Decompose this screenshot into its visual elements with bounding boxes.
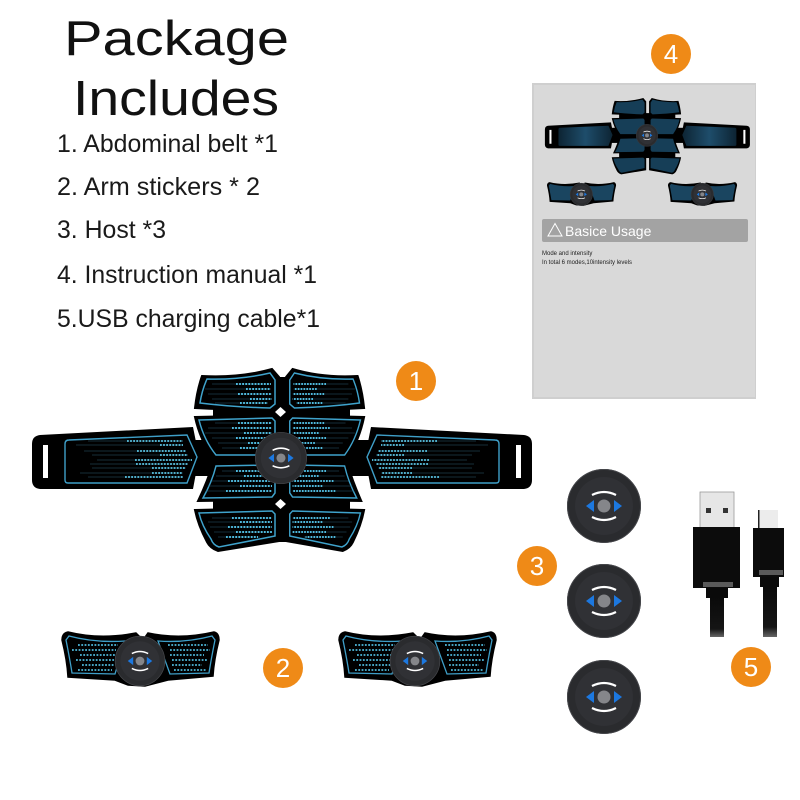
instruction manual: [532, 83, 756, 399]
badge 1: 1: [409, 366, 423, 396]
title: Includes: [73, 72, 279, 126]
package contents list: [57, 130, 320, 333]
title: [64, 12, 289, 126]
badge 3: [517, 546, 557, 586]
badge 2: 2: [276, 653, 290, 683]
white gaps: [275, 407, 286, 509]
host unit bottom: [567, 660, 641, 734]
usage text: [542, 251, 632, 266]
usage text: Mode and intensity: [542, 251, 592, 257]
belt control hub: [255, 432, 307, 484]
belt backing: [190, 377, 372, 542]
usage heading bar: Basice Usage: [565, 223, 652, 239]
package contents list: 5.USB charging cable*1: [57, 305, 320, 333]
abdominal belt: [32, 369, 532, 551]
left strap: [32, 427, 199, 489]
USB-C connector: [753, 510, 784, 637]
package contents list: 4. Instruction manual *1: [57, 261, 317, 289]
package contents list: 1. Abdominal belt *1: [57, 130, 278, 158]
badge 5: [731, 647, 771, 687]
package contents list: 2. Arm stickers * 2: [57, 173, 260, 201]
right strap: [365, 427, 532, 489]
manual arm sticker right: [668, 182, 737, 206]
usage text: In total 6 modes,10intensity levels: [542, 260, 632, 266]
badge 4: [651, 34, 691, 74]
USB cable: [693, 492, 784, 637]
badge 1: [396, 361, 436, 401]
host unit top: [567, 469, 641, 543]
manual arm sticker left: [547, 182, 616, 206]
badge 5: 5: [744, 652, 758, 682]
host unit middle: [567, 564, 641, 638]
manual belt illustration: [545, 98, 750, 174]
right pads: [286, 369, 364, 551]
USB-A connector: [693, 492, 740, 637]
title: Package: [64, 12, 289, 66]
left pads: [195, 369, 279, 551]
badge 4: 4: [664, 39, 678, 69]
usage heading bar: [542, 219, 748, 242]
arm sticker right: [339, 632, 496, 686]
package contents list: 3. Host *3: [57, 216, 166, 244]
arm sticker left: [62, 632, 219, 686]
badge 3: 3: [530, 551, 544, 581]
badge 2: [263, 648, 303, 688]
